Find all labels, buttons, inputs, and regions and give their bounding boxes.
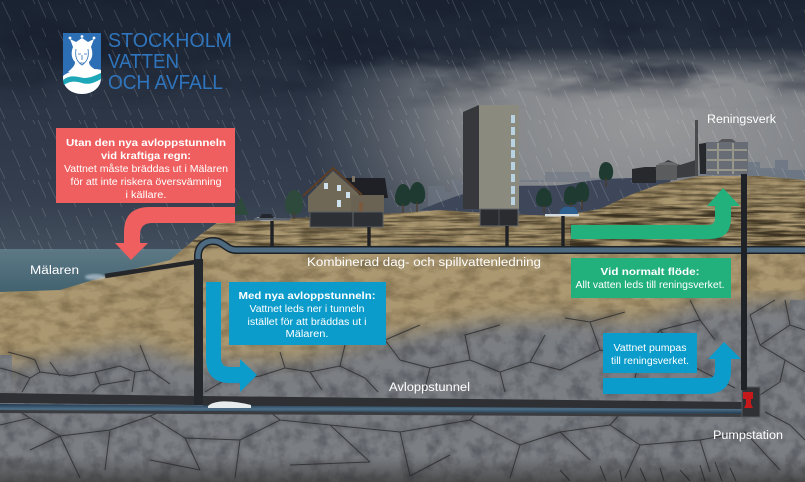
combined sewer pipeline [198, 241, 805, 262]
label: treatment plant: Reningsverk [707, 114, 776, 126]
distant city and hill [420, 160, 805, 218]
rock cracks [0, 300, 805, 481]
logo wordmark: VATTEN [108, 51, 179, 73]
blue callout: pump [603, 333, 697, 373]
blue callout: pump: till reningsverket. [611, 356, 689, 367]
treatment plant [632, 120, 748, 183]
red callout: Vattnet måste bräddas ut i Mälaren [64, 163, 228, 175]
logo [63, 30, 232, 94]
red callout: vid kraftiga regn: [101, 150, 191, 162]
blue callout: tunnel: Mälaren. [286, 329, 328, 340]
left car and road [254, 214, 290, 221]
lake Mälaren [0, 249, 190, 292]
blue arrow: down to tunnel [206, 282, 257, 392]
label: Mälaren: Mälaren [30, 265, 79, 277]
logo wordmark: STOCKHOLM [108, 30, 232, 52]
green callout [571, 258, 731, 298]
blue callout: tunnel: Med nya avloppstunneln: [238, 290, 376, 302]
green arrow: normal flow [571, 188, 740, 239]
logo wordmark [108, 30, 232, 94]
green callout: Vid normalt flöde: [600, 266, 700, 278]
red arrow: overflow [115, 207, 235, 260]
service connection pipes [272, 216, 563, 248]
house [303, 168, 388, 227]
blue callout: tunnel [229, 282, 386, 345]
red callout: för att inte riskera översvämning [70, 177, 221, 188]
label: combined pipeline: Kombinerad dag- och spillvattenledning [307, 257, 541, 269]
sky background [0, 0, 805, 262]
tower [463, 105, 519, 226]
vertical drop shaft [194, 259, 203, 405]
blue callout: pump: Vattnet pumpas [614, 343, 686, 354]
right car and road [545, 207, 579, 216]
pump station [741, 174, 760, 417]
label: pump station: Pumpstation [713, 430, 783, 442]
overflow pipe to lake [85, 262, 195, 280]
red callout: i källare. [126, 190, 166, 201]
trees [233, 162, 613, 219]
label: tunnel: Avloppstunnel [389, 382, 470, 394]
sewer tunnel [0, 393, 760, 417]
ground: soil and rock [0, 170, 805, 482]
logo wordmark: OCH AVFALL [108, 72, 223, 94]
red callout: Utan den nya avloppstunneln [66, 137, 226, 149]
blue arrow: pumped up [603, 342, 741, 394]
logo shield [63, 33, 101, 94]
red callout [56, 128, 235, 203]
blue callout: tunnel: istället för att bräddas ut i [248, 317, 366, 328]
green callout: Allt vatten leds till reningsverket. [576, 280, 724, 291]
rain overlay [0, 0, 805, 250]
blue callout: tunnel: Vattnet leds ner i tunneln [250, 304, 364, 315]
